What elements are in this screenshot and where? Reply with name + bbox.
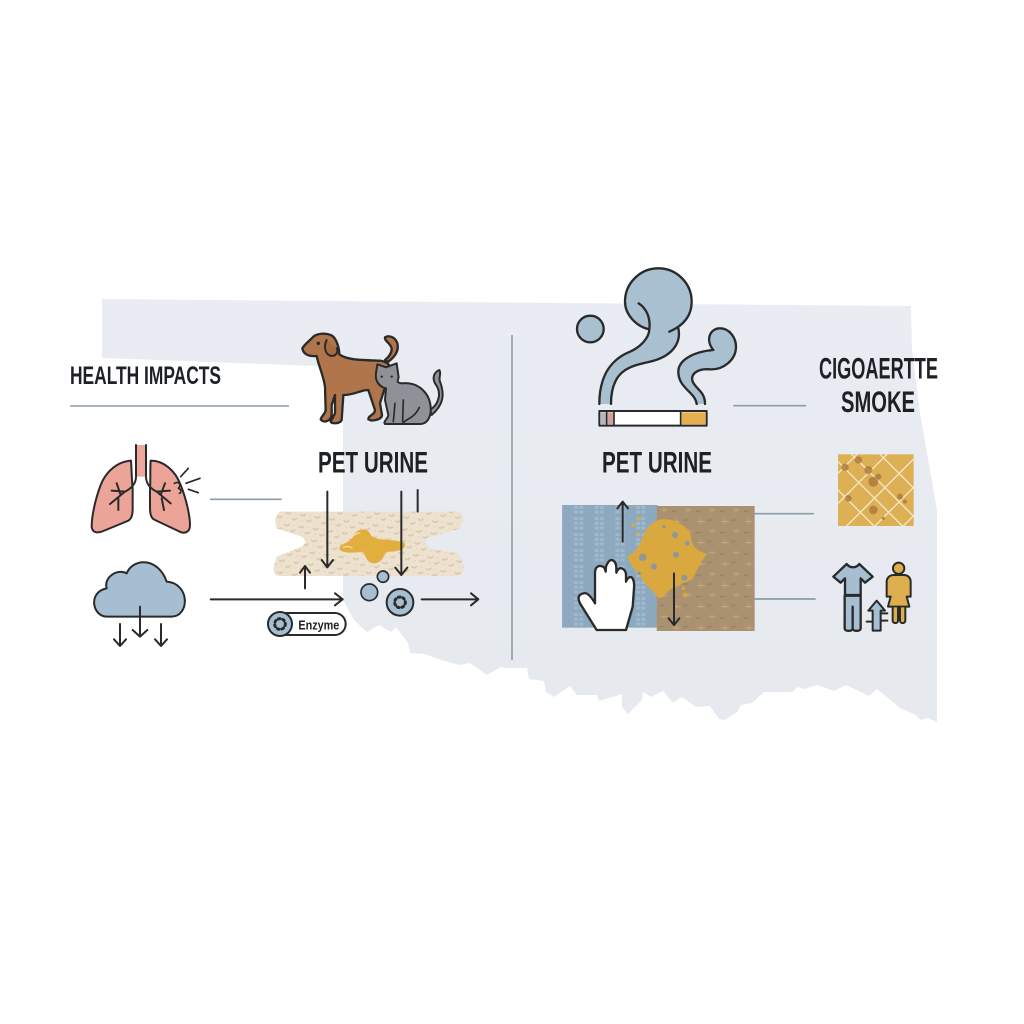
heading: health impacts: HEALTH IMPACTS bbox=[70, 362, 221, 390]
arrow: cloud to enzyme bbox=[211, 593, 343, 605]
carpet cross-section bbox=[273, 512, 464, 576]
icon: person bbox=[887, 563, 911, 623]
icon: smoke puff small bbox=[678, 328, 736, 404]
connector: carpet to tile bbox=[755, 511, 813, 516]
icon: up arrow bbox=[867, 601, 887, 631]
enzyme bubbles bbox=[361, 571, 413, 616]
connector: lungs bbox=[211, 497, 281, 502]
icon: lungs bbox=[92, 445, 200, 533]
heading: cigarette smoke bbox=[819, 352, 938, 419]
left section artwork bbox=[92, 334, 478, 646]
heading: pet urine (right): PET URINE bbox=[602, 446, 712, 480]
enzyme label pill: Enzyme bbox=[298, 617, 339, 632]
icon: dog bbox=[302, 334, 398, 423]
heading: cigarette smoke: CIGOAERTTE bbox=[819, 352, 938, 386]
icon: smoke puff large bbox=[599, 268, 692, 404]
arrow: enzyme output bbox=[422, 593, 478, 605]
background state-shaped map bbox=[102, 299, 937, 722]
icon: cigarette bbox=[599, 411, 707, 426]
enzyme label pill bbox=[268, 612, 346, 636]
connector: cigarette bbox=[734, 403, 805, 408]
arrows on carpet bbox=[617, 502, 679, 625]
carpet panel bbox=[562, 505, 755, 631]
connector: carpet to clothing bbox=[755, 596, 815, 601]
icon: small smoke circle bbox=[577, 316, 604, 342]
right section artwork bbox=[562, 268, 914, 631]
center divider bbox=[511, 335, 513, 660]
yellow stain bbox=[627, 519, 707, 598]
heading: pet urine (left): PET URINE bbox=[318, 446, 428, 480]
arrows into carpet bbox=[300, 490, 418, 588]
heading: cigarette smoke: SMOKE bbox=[841, 386, 915, 419]
icon: cat bbox=[376, 363, 443, 424]
icon: clothing bbox=[833, 564, 873, 631]
urine stain bbox=[339, 529, 405, 563]
stained tile swatch bbox=[838, 454, 914, 526]
icon: cloud with falling arrows bbox=[94, 562, 185, 646]
icon: hand bbox=[579, 560, 634, 630]
